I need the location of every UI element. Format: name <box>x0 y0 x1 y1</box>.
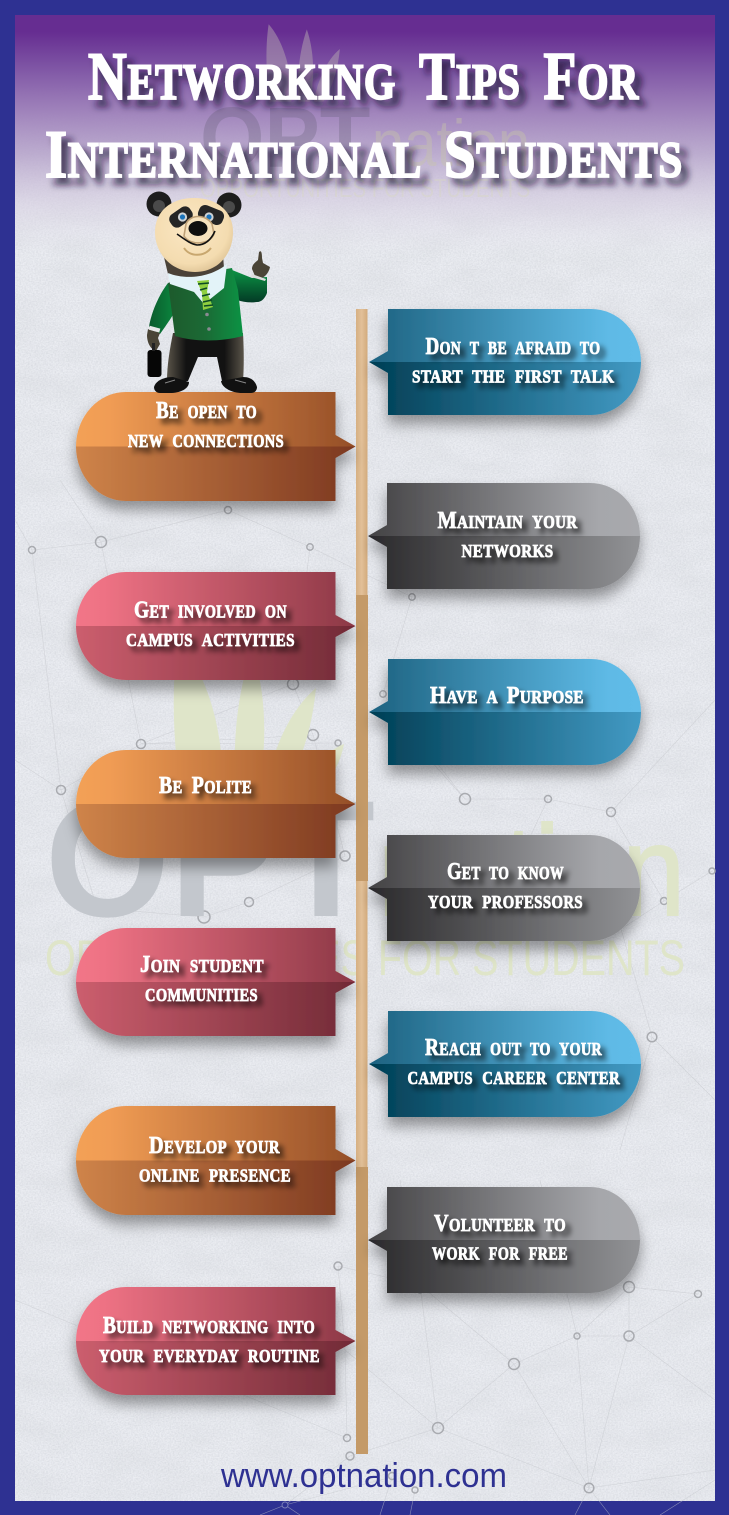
tip: Don't be afraid to start the first talk: START THE FIRST TALK <box>412 366 614 386</box>
panda head <box>155 198 233 272</box>
watermark: small OPTnation logo: OPPORTUNITIES FOR STUDENTS <box>200 175 530 203</box>
tip: Reach out to your campus career center: CAMPUS CAREER CENTER <box>408 1068 620 1088</box>
tip: Develop your online presence: ONLINE PRESENCE <box>139 1166 291 1186</box>
tip: Get involved on campus activities: GET INVOLVED ON <box>134 598 287 624</box>
title: INTERNATIONAL STUDENTS <box>45 116 683 192</box>
tip: Develop your online presence <box>76 1106 355 1215</box>
panda jacket <box>168 268 243 340</box>
tip: Have a Purpose <box>369 659 641 765</box>
tip: Get to know your professors <box>368 835 640 941</box>
tip: Reach out to your campus career center <box>369 1011 641 1117</box>
tip: Join student communities: COMMUNITIES <box>145 985 258 1005</box>
panda shirt collar <box>168 264 227 304</box>
panda left arm <box>149 283 177 334</box>
tip: Have a Purpose: HAVE A PURPOSE <box>430 683 584 709</box>
icon: panda mascot in green suit <box>146 192 270 393</box>
tip: Build networking into your everyday routine: YOUR EVERYDAY ROUTINE <box>99 1346 320 1366</box>
panda mouth <box>177 231 215 255</box>
title: NETWORKING TIPS FOR <box>88 38 639 114</box>
panda shoes <box>154 377 257 393</box>
website url: www.optnation.com <box>220 1457 507 1495</box>
tip: Be open to new connections <box>76 392 356 501</box>
tip: Volunteer to work for free: WORK FOR FREE <box>432 1244 568 1264</box>
tip: Maintain your networks <box>368 483 640 589</box>
tip: Get involved on campus activities: CAMPUS ACTIVITIES <box>126 630 295 650</box>
tip: Develop your online presence: DEVELOP YOUR <box>149 1133 280 1159</box>
tip: Get to know your professors: GET TO KNOW <box>447 859 564 885</box>
tip: Be open to new connections: NEW CONNECTIONS <box>128 431 284 451</box>
panda ears <box>146 192 242 218</box>
watermark: large OPTnation logo: OPT <box>45 767 375 952</box>
panda trousers <box>167 333 244 381</box>
tip: Get involved on campus activities <box>76 572 356 680</box>
panda jacket buttons <box>205 313 211 331</box>
tip: Join student communities: JOIN STUDENT <box>140 952 264 978</box>
tip: Get to know your professors: YOUR PROFESSORS <box>428 892 583 912</box>
panda glove and briefcase <box>147 326 162 377</box>
panda nose <box>188 221 208 236</box>
watermark: large OPTnation logo: nation <box>378 800 685 943</box>
tip: Join student communities <box>76 928 356 1036</box>
panda neck <box>163 253 224 277</box>
tip: Be open to new connections: BE OPEN TO <box>156 398 257 424</box>
tip: Build networking into your everyday routine: BUILD NETWORKING INTO <box>103 1313 315 1339</box>
tip: Don't be afraid to start the first talk <box>369 309 641 415</box>
tip: Be Polite <box>76 750 356 858</box>
panda necktie <box>197 280 213 310</box>
tip: Volunteer to work for free <box>368 1187 640 1293</box>
watermark: large OPTnation logo <box>45 640 685 986</box>
network pattern <box>15 480 715 1515</box>
panda eye patches <box>167 203 226 230</box>
tip: Reach out to your campus career center: REACH OUT TO YOUR <box>425 1035 602 1061</box>
watermark: small OPTnation logo: OPT <box>200 90 370 186</box>
tip: Volunteer to work for free: VOLUNTEER TO <box>434 1211 566 1237</box>
panda eyes <box>178 212 214 222</box>
title <box>45 38 683 192</box>
tip: Don't be afraid to start the first talk: DON T BE AFRAID TO <box>426 334 600 360</box>
panda pointing hand <box>251 251 270 281</box>
tip: Maintain your networks: MAINTAIN YOUR <box>438 508 578 534</box>
tip: Be Polite: BE POLITE <box>159 773 252 799</box>
tip: Build networking into your everyday routine <box>76 1287 356 1395</box>
tip: Maintain your networks: NETWORKS <box>462 541 554 561</box>
watermark: small OPTnation logo: nation <box>372 106 530 180</box>
panda right arm <box>232 270 267 302</box>
central timeline pole <box>356 309 368 1454</box>
panda muzzle <box>184 216 214 243</box>
watermark: small OPTnation logo <box>200 24 530 203</box>
